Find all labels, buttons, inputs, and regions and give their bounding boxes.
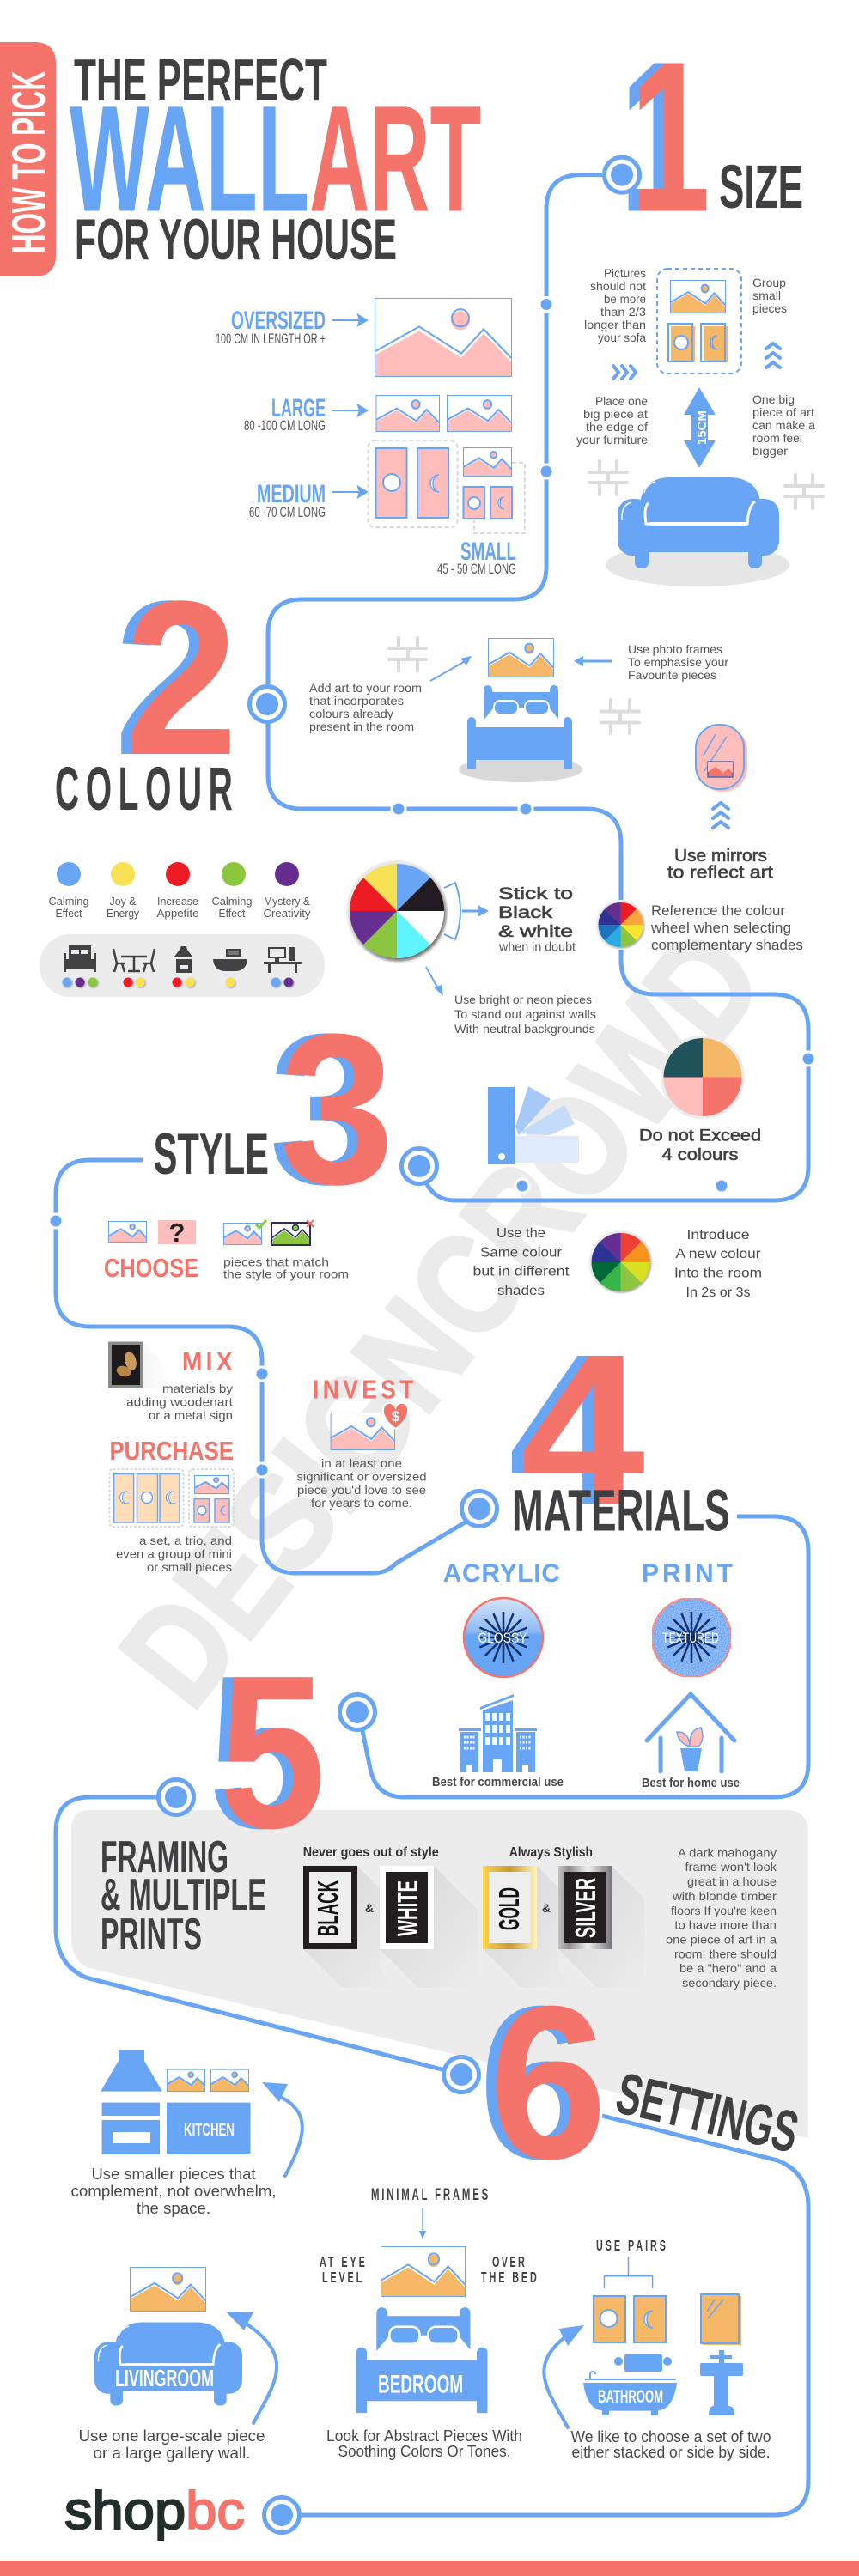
reference wheel text: Reference the colour [651,902,785,919]
over the bed label: OVER [492,2254,525,2271]
icon: brick right [785,475,823,508]
size tips text: can make a [752,418,815,432]
section number 1: 1 [630,17,710,256]
framing text [666,1845,777,1990]
legend colours: Joy & [110,895,137,908]
framing text: room, there should [674,1947,777,1960]
bathroom text: We like to choose a set of two [570,2428,771,2445]
icon: bed [64,945,96,972]
ampersand: & [365,1901,374,1915]
icon: brick left [589,461,627,495]
size arrows [332,315,367,497]
section number 3: 3 [269,989,384,1229]
bright pieces text [454,993,596,1036]
colour wheel 3 [589,1230,653,1294]
size tips text [576,266,815,458]
size labels: LARGE [271,394,326,422]
do not exceed text [639,1127,761,1164]
frame: black: BLACK [312,1880,344,1936]
size labels: 100 CM IN LENGTH OR + [216,331,326,347]
colour text blocks [309,642,728,733]
double arrow 15cm [684,387,716,468]
kitchen text: the space. [137,2200,210,2217]
pie four colours [661,1036,745,1120]
heading: size: SIZE [719,154,803,222]
bathroom text: either stacked or side by side. [572,2444,770,2461]
choose text: the style of your room [223,1267,349,1280]
same colour text: Same colour [480,1245,563,1261]
section number 4: 4 [509,1309,634,1549]
introduce text: A new colour [675,1247,761,1261]
footer bar [0,2561,859,2576]
colour wheel [346,860,489,996]
acrylic column: ACRYLIC [443,1559,560,1588]
size tips text: small [752,289,781,302]
icon: chevrons right [613,366,636,379]
invest heading: INVEST [313,1376,414,1405]
timeline path [56,175,808,2515]
panel: framing background [71,1810,808,2138]
choose heading: CHOOSE [104,1253,198,1283]
title: FOR YOUR HOUSE [75,207,397,272]
kitchen text: complement, not overwhelm, [70,2183,277,2200]
at eye level label: AT EYE [320,2254,365,2271]
invest text: significant or oversized [297,1470,426,1484]
title: ART [309,76,481,244]
do not exceed text: Do not Exceed [639,1127,761,1145]
choose text: pieces that match [223,1255,329,1269]
logo: shopbc: shopbc [64,2482,245,2541]
mirror icon [696,725,747,792]
size tips text: room feel [752,431,802,445]
frame captions: Never goes out of style [303,1845,439,1860]
mirror caption [667,847,774,883]
frame: silver [558,1866,612,1949]
colour text blocks: Add art to your room [309,681,422,695]
minimal frames label: MINIMAL FRAMES [371,2186,488,2204]
reference wheel text: complementary shades [651,937,803,953]
print column: PRINT [642,1559,733,1588]
section number 4: 4 [520,1309,645,1549]
size tips text: your furniture [576,433,648,447]
at eye level label: LEVEL [322,2269,362,2287]
section number 1: 1 [619,17,700,256]
stick to black and white: Black [498,904,553,922]
size labels [216,307,516,577]
legend colours: Calming [48,895,89,908]
frame: white [380,1866,434,1949]
bedroom illustration: BEDROOM [378,2370,463,2399]
invest icon [331,1403,408,1451]
kitchen illustration: KITCHEN [184,2121,235,2140]
heading: style: STYLE [154,1121,269,1187]
section number 2: 2 [125,556,238,801]
colour text blocks: Use photo frames [628,642,722,656]
section number 3: 3 [279,989,394,1229]
colour text blocks: To emphasise your [628,655,728,669]
introduce text: Into the room [674,1266,762,1281]
at eye level label [320,2254,365,2287]
ampersand: & [542,1901,551,1915]
legend colours: Increase [157,895,198,908]
size tips text: the edge of [586,420,648,434]
kitchen text: Use smaller pieces that [91,2166,256,2183]
over the bed label: THE BED [481,2269,537,2287]
bathroom text [570,2428,771,2461]
size tips text: One big [752,392,795,406]
acrylic column: GLOSSY [478,1630,527,1646]
grouped art [657,269,741,374]
size tips text: Place one [595,394,648,408]
framing text: one piece of art in a [666,1932,777,1946]
bedroom text: Look for Abstract Pieces With [326,2427,522,2445]
icon: chevrons up [766,343,780,368]
legend colours: Effect [55,907,82,920]
reference wheel text: wheel when selecting [650,920,791,936]
framing text: floors If you're keen [671,1904,777,1917]
frame: silver: SILVER [570,1878,601,1938]
acrylic column [443,1559,560,1677]
introduce text [674,1228,762,1300]
mix text: materials by [162,1382,233,1395]
choose icons: ? [169,1218,185,1248]
section number 6: 6 [489,1960,607,2204]
icon: brick [389,638,426,671]
heading: framing: & MULTIPLE [101,1870,266,1920]
size tips text: Group [752,276,786,289]
bright pieces text: With neutral backgrounds [454,1022,595,1036]
icon: building [459,1694,537,1772]
stick to black and white: Stick to [498,885,573,903]
frame: gold [483,1866,537,1949]
section number 5: 5 [209,1630,315,1874]
icon: dining table [113,949,155,972]
size tips text: Pictures [604,266,646,280]
size labels: 60 -70 CM LONG [249,504,326,520]
legend colours: Effect [218,907,246,920]
stick to black and white: when in doubt [498,939,576,955]
bathroom art [594,2294,741,2345]
icon: desk [264,947,302,973]
invest text: piece you'd love to see [297,1483,426,1497]
minimal frames label [371,2186,488,2239]
bedroom text [326,2427,522,2460]
legend colours: Energy [107,907,139,920]
heading: framing [101,1832,266,1959]
print column [642,1559,733,1677]
double arrow 15cm: 15CM [695,410,710,445]
size tips text: big piece at [583,407,648,421]
framing text: frame won't look [685,1860,777,1874]
purchase text [116,1534,232,1574]
purchase text: or small pieces [147,1560,232,1574]
mirror caption: to reflect art [667,864,774,883]
legend colours: Calming [211,895,253,908]
living room illustration: LIVINGROOM [115,2365,214,2391]
frame: white: WHITE [392,1880,423,1936]
mix text [126,1347,233,1422]
size tips text: should not [590,279,646,293]
art size examples [368,298,525,533]
use pairs label [596,2238,666,2288]
frame captions [303,1845,593,1860]
bright pieces text: Use bright or neon pieces [454,993,592,1006]
commercial caption: Best for commercial use [432,1775,564,1789]
same colour text: Use the [497,1226,545,1241]
framing text: A dark mahogany [678,1845,777,1859]
heading: framing: FRAMING [101,1832,228,1882]
legend colours: Mystery & [264,895,310,908]
panel: room colour pill [40,934,325,997]
purchase heading: PURCHASE [110,1436,234,1466]
swatch fan [488,1086,579,1164]
section number 5: 5 [219,1630,326,1874]
mix text: MIX [182,1347,233,1376]
same colour text [472,1226,570,1298]
frame: black [303,1866,357,1949]
purchase icons [110,1469,234,1527]
framing text: great in a house [687,1874,777,1888]
kitchen text [70,2166,277,2217]
living room text: Use one large-scale piece [79,2427,265,2445]
icon: chevrons up [713,803,728,828]
small colour wheel [596,900,646,950]
sofa with shadow [606,477,789,586]
title: WALL [70,76,309,244]
heading: framing: PRINTS [101,1910,202,1959]
kitchen illustration [101,2050,251,2154]
living room text: or a large gallery wall. [93,2445,251,2462]
choose text [223,1255,349,1280]
legend colours: Creativity [263,907,311,920]
invest text [297,1456,426,1510]
section number 6: 6 [478,1960,597,2204]
colour tip with bed [430,638,612,782]
frame captions: Always Stylish [509,1845,593,1860]
purchase text: a set, a trio, and [139,1534,232,1547]
bright pieces text: To stand out against walls [454,1007,596,1021]
colour text blocks: Favourite pieces [628,668,716,682]
size labels: SMALL [460,538,516,566]
legend colours: Appetite [156,907,199,920]
size tips text: longer than [584,318,646,331]
mix text: adding woodenart [126,1394,233,1408]
size tips text: bigger [752,444,788,458]
icon: house and plant [647,1694,734,1771]
stick to black and white [498,885,576,955]
frame shadows [303,1866,644,1988]
title: THE PERFECT [74,46,327,113]
size labels: MEDIUM [257,480,326,508]
size tips text: pieces [752,301,787,315]
bedroom illustration [356,2246,488,2413]
over the bed label [481,2254,537,2287]
print column: TEXTURED [662,1630,719,1646]
icon: bathtub [213,949,247,971]
mirror caption: Use mirrors [674,847,767,866]
timeline nodes [158,157,639,2532]
size tips text: your sofa [598,331,646,344]
bedroom text: Soothing Colors Or Tones. [338,2443,510,2460]
framing text: be a "hero" and a [679,1961,777,1975]
invest text: in at least one [321,1456,402,1470]
icon: hood and cabinet [174,946,192,973]
reference wheel text [650,902,803,953]
section number 2: 2 [114,556,228,801]
bathroom illustration [583,2350,743,2415]
do not exceed text: 4 colours [661,1146,739,1164]
mix text: or a metal sign [149,1408,233,1422]
living room illustration [94,2267,242,2405]
framing text: with blonde timber [672,1889,777,1903]
colour text blocks: that incorporates [309,694,404,708]
arrow: living room [226,2312,277,2423]
size tips text: piece of art [752,405,814,419]
frame: gold: GOLD [493,1887,525,1930]
use pairs label: USE PAIRS [596,2238,666,2255]
size tips text: be more [604,292,646,306]
purchase text: even a group of mini [116,1547,232,1561]
icon: brick [601,700,639,733]
heading: colour: COLOUR [55,756,233,823]
size labels: 45 - 50 CM LONG [437,561,516,577]
size tips text: than 2/3 [600,305,646,319]
timeline dots [49,297,815,1477]
living room text [79,2427,265,2462]
arrow: kitchen [262,2082,302,2176]
mix icon [108,1341,172,1388]
introduce text: Introduce [687,1228,750,1242]
size labels: OVERSIZED [231,307,326,335]
legend colours [48,862,311,920]
framing text: secondary piece. [682,1976,777,1990]
framing text: to have more than [674,1918,777,1932]
choose icons [108,1218,314,1248]
same colour text: but in different [472,1264,570,1279]
introduce text: In 2s or 3s [685,1285,751,1300]
arrow: bathroom [544,2325,584,2427]
invest icon: $ [392,1408,400,1425]
invest text: for years to come. [311,1496,412,1510]
stick to black and white: & white [498,923,573,941]
heading: materials: MATERIALS [512,1478,730,1544]
room colour dots [62,977,294,987]
home caption: Best for home use [642,1776,740,1790]
same colour text: shades [497,1284,545,1298]
colour text blocks: present in the room [309,720,414,733]
size labels: 80 -100 CM LONG [244,417,326,434]
colour text blocks: colours already [309,707,393,720]
bathroom illustration: BATHROOM [598,2387,663,2407]
